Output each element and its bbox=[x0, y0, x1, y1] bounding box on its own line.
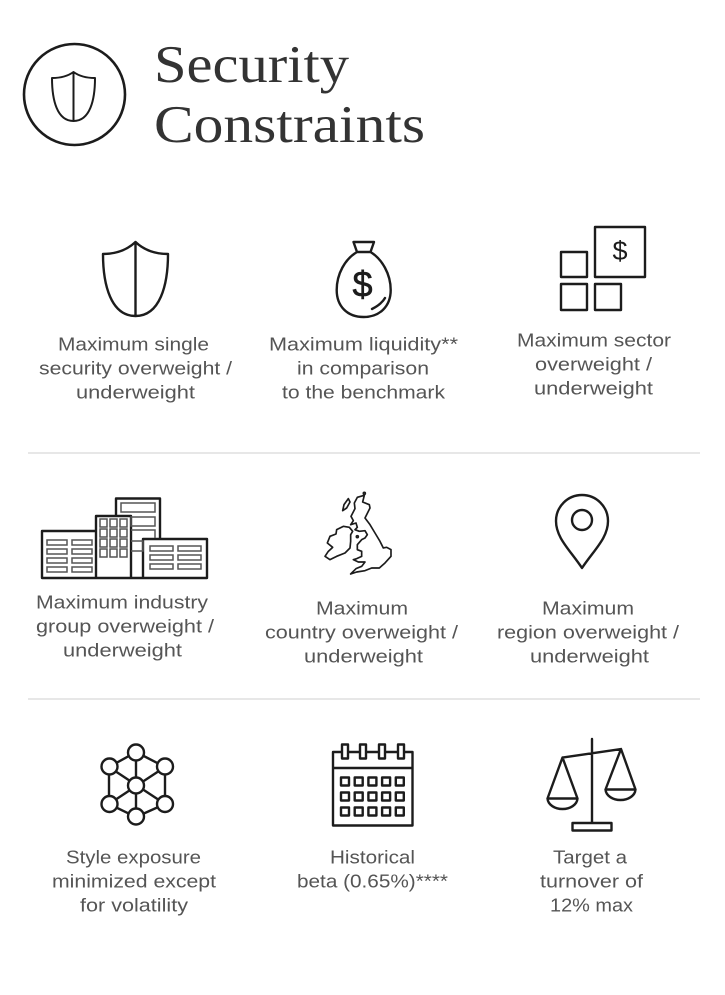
label: country: underweight bbox=[304, 646, 423, 667]
icon: buildings bbox=[42, 498, 207, 578]
header bbox=[24, 36, 425, 154]
label: single security: security overweight / bbox=[39, 358, 233, 379]
panel: region bbox=[497, 495, 680, 667]
icon: network bbox=[102, 744, 173, 824]
label: style exposure: for volatility bbox=[80, 895, 189, 916]
label: liquidity bbox=[269, 334, 458, 403]
label: industry group bbox=[36, 592, 215, 661]
icon: sector squares bbox=[561, 227, 645, 310]
panel: country bbox=[265, 492, 459, 667]
label: country: country overweight / bbox=[265, 622, 459, 643]
label: historical beta: beta (0.65%)**** bbox=[297, 871, 448, 892]
icon: shield in circle bbox=[24, 44, 125, 145]
panel: industry group bbox=[36, 498, 215, 661]
label: single security: Maximum single bbox=[58, 334, 209, 355]
panel: historical beta bbox=[297, 744, 448, 892]
panel: turnover bbox=[540, 739, 644, 916]
icon: sector squares: $ bbox=[612, 236, 628, 266]
label: sector bbox=[517, 330, 671, 399]
title bbox=[154, 36, 425, 154]
label: industry group: group overweight / bbox=[36, 616, 215, 637]
panel: liquidity bbox=[269, 242, 458, 403]
label: region: Maximum bbox=[542, 598, 634, 619]
icon: shield bbox=[103, 242, 168, 316]
label: turnover: Target a bbox=[553, 847, 628, 868]
label: single security bbox=[39, 334, 233, 403]
label: region: region overweight / bbox=[497, 622, 680, 643]
label: liquidity: Maximum liquidity** bbox=[269, 334, 458, 355]
icon: money bag: $ bbox=[352, 264, 373, 304]
label: style exposure bbox=[52, 847, 216, 916]
title: Constraints bbox=[154, 96, 425, 154]
icon: balance scale bbox=[548, 739, 636, 830]
label: style exposure: minimized except bbox=[52, 871, 216, 892]
label: industry group: Maximum industry bbox=[36, 592, 209, 613]
label: historical beta bbox=[297, 847, 448, 892]
label: region bbox=[497, 598, 680, 667]
label: style exposure: Style exposure bbox=[66, 847, 201, 868]
icon: money bag bbox=[337, 242, 391, 317]
label: turnover: 12% max bbox=[550, 895, 634, 916]
icon: location pin bbox=[556, 495, 608, 568]
panel: single security bbox=[39, 242, 233, 403]
title: Security bbox=[154, 36, 350, 94]
icon: UK map bbox=[325, 492, 391, 574]
label: single security: underweight bbox=[76, 382, 195, 403]
label: industry group: underweight bbox=[63, 640, 182, 661]
label: turnover bbox=[540, 847, 644, 916]
label: country: Maximum bbox=[316, 598, 408, 619]
label: historical beta: Historical bbox=[330, 847, 415, 868]
label: region: underweight bbox=[530, 646, 649, 667]
label: liquidity: in comparison bbox=[297, 358, 429, 379]
label: turnover: turnover of bbox=[540, 871, 644, 892]
panel: sector bbox=[517, 227, 671, 399]
label: sector: overweight / bbox=[535, 354, 653, 375]
label: country bbox=[265, 598, 459, 667]
panel: style exposure bbox=[52, 744, 216, 916]
label: liquidity: to the benchmark bbox=[282, 382, 446, 403]
label: sector: Maximum sector bbox=[517, 330, 671, 351]
icon: calendar bbox=[333, 744, 412, 826]
label: sector: underweight bbox=[534, 378, 653, 399]
